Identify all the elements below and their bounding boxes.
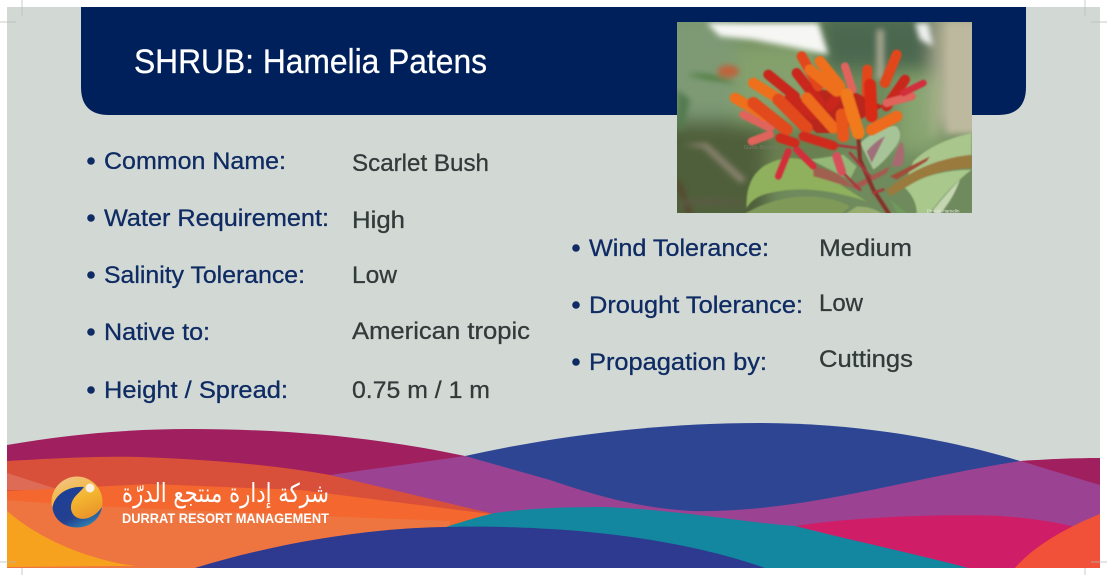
row: height and spread xyxy=(87,377,490,404)
row: salinity tolerance: Salinity Tolerance: xyxy=(104,262,305,289)
row: native to: Native to: xyxy=(104,319,210,346)
header banner xyxy=(81,7,1026,115)
decorative wave band xyxy=(7,423,1100,568)
row: salinity tolerance: Low xyxy=(352,262,397,289)
row: native to: American tropic xyxy=(352,318,530,345)
leaves xyxy=(738,126,972,218)
row: height and spread: Height / Spread: xyxy=(104,377,288,404)
flower petals xyxy=(735,55,923,176)
logo: Durrat Resort Management xyxy=(52,476,330,528)
row: common name: Scarlet Bush xyxy=(352,150,489,177)
row: propagation: Cuttings xyxy=(819,346,913,373)
English company name: DURRAT RESORT MANAGEMENT xyxy=(122,511,330,526)
row: propagation: Propagation by: xyxy=(589,349,767,376)
title: SHRUB: Hamelia Patens xyxy=(134,43,487,81)
row: common name: Common Name: xyxy=(104,148,286,175)
Arabic company name: شركة إدارة منتجع الدرّة xyxy=(122,479,329,509)
row: wind tolerance: Medium xyxy=(819,235,912,262)
row: salinity tolerance xyxy=(87,262,397,289)
photo: Hamelia patens flower: Gunn Burden xyxy=(744,145,778,151)
row: native to xyxy=(87,318,530,346)
row: water requirement: High xyxy=(352,207,405,234)
photo: Hamelia patens flower: Dinesh Hamelin xyxy=(927,208,960,213)
row: wind tolerance: Wind Tolerance: xyxy=(589,235,769,262)
row: drought tolerance xyxy=(572,290,863,319)
left attribute list xyxy=(87,148,530,404)
right attribute list xyxy=(572,235,913,376)
row: drought tolerance: Drought Tolerance: xyxy=(589,292,803,319)
photo: Hamelia patens flower xyxy=(677,22,972,213)
row: water requirement: Water Requirement: xyxy=(104,205,329,232)
row: propagation xyxy=(572,346,913,376)
row: drought tolerance: Low xyxy=(819,290,863,317)
icon: swirl emblem xyxy=(52,476,102,528)
row: wind tolerance xyxy=(572,235,912,262)
row: common name xyxy=(87,148,489,177)
row: height and spread: 0.75 m / 1 m xyxy=(352,377,490,404)
row: water requirement xyxy=(87,205,405,234)
stems xyxy=(837,138,892,213)
